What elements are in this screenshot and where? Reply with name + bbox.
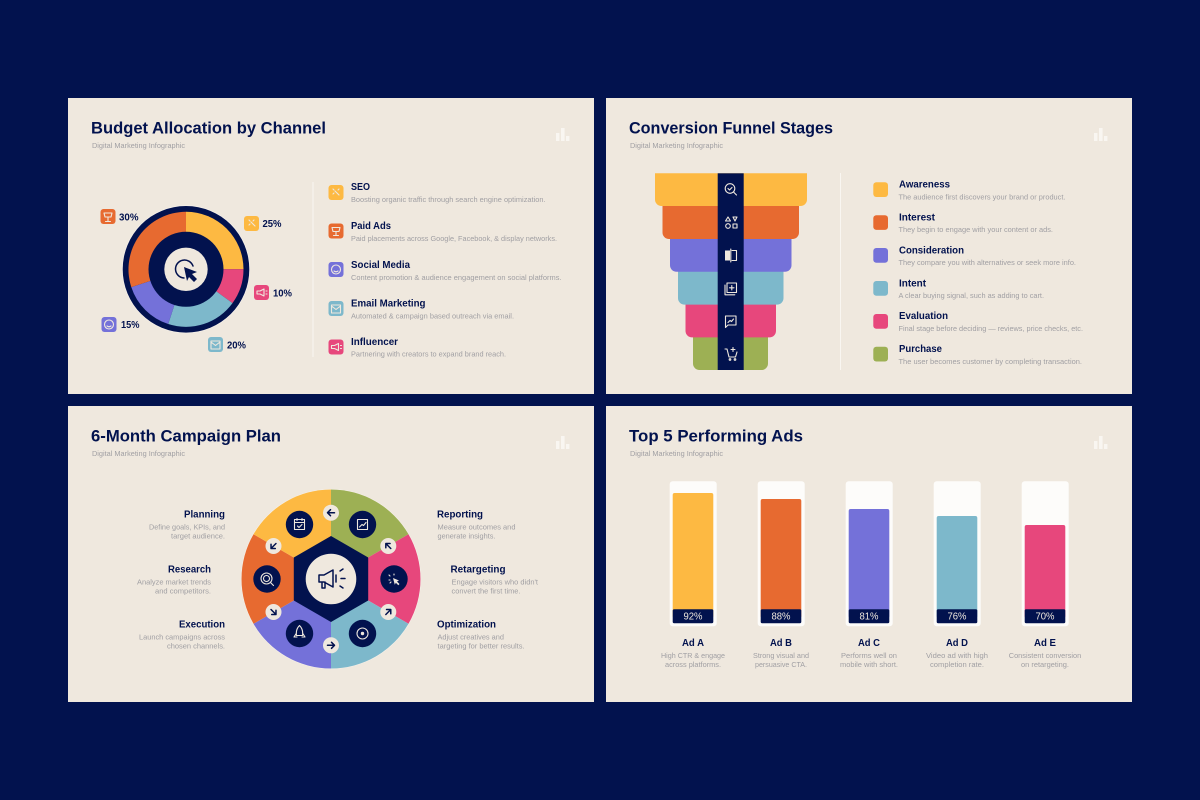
icon: cursor click	[176, 260, 197, 282]
step: Reporting: generate insights.	[438, 532, 496, 540]
bar: Ad D 76%: Video ad with high	[926, 651, 988, 660]
hexagon wheel	[241, 489, 421, 669]
step: Retargeting: Retargeting	[450, 564, 506, 576]
bar: Ad C 81%: Performs well on	[841, 651, 897, 660]
bar: Ad C 81%: 81%	[860, 612, 879, 622]
legend item: Social Media	[328, 260, 562, 282]
label: 20%	[208, 337, 247, 352]
divider	[840, 173, 841, 370]
bar: Ad D 76%: 76%	[948, 612, 967, 622]
step: Execution: Execution	[179, 620, 225, 630]
icon: circle dot	[349, 620, 376, 647]
icon: magnifier check	[725, 184, 736, 195]
bar: Ad B 88%	[753, 481, 809, 669]
bar: Ad A 92%	[661, 481, 725, 669]
bar: Ad D 76%: completion rate.	[930, 660, 984, 669]
icon: cursor spark	[380, 565, 408, 593]
legend item: Purchase	[873, 344, 1082, 366]
step: Planning: Define goals, KPIs, and	[149, 522, 225, 532]
legend item: Influencer: Influencer	[351, 337, 398, 348]
step: Retargeting	[450, 564, 539, 596]
icon: compare	[725, 249, 736, 262]
panel: conversion funnel stages	[606, 98, 1132, 394]
legend item: Paid Ads: Paid Ads	[351, 221, 391, 232]
bar: Ad E 70%: Ad E	[1034, 638, 1056, 649]
step: Optimization: Optimization	[437, 620, 496, 630]
divider	[312, 182, 314, 357]
legend item: Purchase: Purchase	[899, 344, 942, 355]
arrow: optimization to retargeting	[380, 604, 396, 620]
icon: growth chart	[349, 511, 376, 538]
legend item: Interest: Interest	[899, 212, 936, 224]
panel: 6-month campaign plan	[68, 406, 594, 702]
step: Execution	[139, 620, 225, 650]
legend item: Interest: They begin to engage with your content or ads.	[898, 225, 1053, 234]
legend item: SEO	[328, 182, 546, 204]
icon: bar chart mark	[1094, 436, 1107, 449]
bar: Ad A 92%: across platforms.	[665, 660, 721, 669]
arrow: execution to optimization	[323, 637, 339, 653]
step: Retargeting: Engage visitors who didn't	[452, 578, 539, 586]
step: Reporting	[437, 510, 516, 540]
legend item: Intent: A clear buying signal, such as adding to cart.	[898, 291, 1044, 300]
icon: megaphone	[319, 569, 345, 588]
subtitle: Digital Marketing Infographic	[92, 449, 185, 458]
legend item: Email Marketing: Email Marketing	[351, 298, 426, 310]
label: 10%	[254, 285, 293, 300]
legend item: Awareness: The audience first discovers your brand or product.	[898, 192, 1066, 201]
label: 25%: 25%	[262, 218, 282, 230]
arrow: research to execution	[266, 604, 282, 620]
panel: top 5 performing ads	[606, 406, 1132, 702]
title: Budget Allocation by Channel	[91, 120, 326, 138]
bar: Ad E 70%: 70%	[1036, 612, 1055, 622]
step: Planning: target audience.	[171, 532, 225, 540]
bar: Ad B 88%: Strong visual and	[753, 651, 809, 660]
label: 30%	[100, 209, 139, 224]
step: Reporting: Measure outcomes and	[438, 522, 516, 532]
legend item: Email Marketing	[328, 298, 514, 320]
bar: Ad C 81%: mobile with short.	[840, 660, 898, 669]
legend item: SEO: Boosting organic traffic through search engine optimization.	[351, 195, 546, 204]
icon: shapes	[726, 217, 737, 228]
legend item: Paid Ads	[328, 221, 557, 243]
bar: Ad E 70%	[1009, 481, 1081, 669]
icon: bar chart mark	[556, 436, 569, 449]
subtitle: Digital Marketing Infographic	[630, 141, 723, 150]
title: Top 5 Performing Ads	[629, 428, 803, 446]
icon: rocket	[286, 620, 313, 647]
legend item: Awareness	[873, 180, 1066, 201]
legend item: Influencer	[328, 337, 506, 358]
bar: Ad B 88%: persuasive CTA.	[755, 660, 807, 669]
arrow: retargeting to reporting	[380, 538, 396, 554]
icon: target	[253, 565, 281, 593]
label: 30%: 30%	[119, 212, 139, 224]
legend item: Consideration: They compare you with alternatives or seek more info.	[898, 258, 1076, 267]
label: 20%: 20%	[227, 340, 247, 352]
step: Execution: Launch campaigns across	[139, 632, 225, 642]
step: Retargeting: convert the first time.	[452, 586, 520, 596]
legend item: Awareness: Awareness	[899, 180, 950, 190]
step: Research: Research	[168, 564, 211, 576]
legend item: Evaluation: Evaluation	[899, 311, 948, 322]
title: 6-Month Campaign Plan	[91, 428, 281, 446]
legend item: Consideration: Consideration	[899, 245, 964, 256]
label: 25%	[244, 216, 282, 231]
step: Research: Analyze market trends	[137, 578, 211, 586]
panel: budget allocation by channel	[68, 98, 594, 394]
title: Conversion Funnel Stages	[629, 120, 833, 138]
legend item: Interest	[873, 212, 1053, 234]
arrow: planning to research	[266, 538, 282, 554]
bar: Ad E 70%: Consistent conversion	[1009, 651, 1081, 660]
subtitle: Digital Marketing Infographic	[92, 141, 185, 150]
funnel chart	[655, 173, 807, 370]
legend item: Influencer: Partnering with creators to expand brand reach.	[351, 350, 506, 358]
step: Reporting: Reporting	[437, 510, 483, 520]
bar: Ad C 81%	[840, 481, 898, 669]
bar: Ad B 88%: Ad B	[770, 638, 792, 649]
legend item: Email Marketing: Automated & campaign based outreach via email.	[351, 312, 514, 320]
step: Research: and competitors.	[155, 586, 211, 596]
subtitle: Digital Marketing Infographic	[630, 449, 723, 458]
legend item: Evaluation	[873, 311, 1083, 333]
bar: Ad B 88%: 88%	[772, 612, 791, 622]
step: Execution: chosen channels.	[167, 642, 225, 650]
donut chart	[122, 205, 250, 333]
legend item: Intent	[873, 278, 1044, 300]
legend item: Paid Ads: Paid placements across Google, Facebook, & display networks.	[351, 234, 557, 243]
label: 10%: 10%	[273, 288, 293, 300]
legend item: Intent: Intent	[899, 278, 927, 289]
arrow: reporting to planning	[323, 505, 339, 521]
step: Optimization: Adjust creatives and	[438, 632, 504, 642]
icon: bar chart mark	[1094, 128, 1107, 141]
legend item: Evaluation: Final stage before deciding — reviews, price checks, etc.	[898, 324, 1083, 333]
step: Planning	[149, 510, 225, 540]
bar: Ad C 81%: Ad C	[858, 638, 880, 649]
legend item: Social Media: Content promotion & audience engagement on social platforms.	[351, 273, 562, 282]
legend item: Social Media: Social Media	[351, 260, 410, 271]
step: Planning: Planning	[184, 510, 225, 520]
label: 15%: 15%	[121, 319, 140, 331]
legend item: SEO: SEO	[351, 182, 370, 193]
legend item: Consideration	[873, 245, 1076, 267]
bar: Ad D 76%	[926, 481, 988, 669]
icon: add to list	[725, 283, 736, 295]
bar: Ad A 92%: Ad A	[682, 638, 704, 649]
label: 15%	[102, 317, 140, 332]
step: Optimization	[437, 620, 524, 650]
bar: Ad E 70%: on retargeting.	[1021, 660, 1069, 669]
bar: Ad D 76%: Ad D	[946, 638, 968, 649]
bar: Ad A 92%: High CTR & engage	[661, 651, 725, 660]
step: Optimization: targeting for better results.	[438, 642, 524, 650]
bar: Ad A 92%: 92%	[684, 612, 703, 622]
step: Research	[137, 564, 211, 596]
icon: bar chart mark	[556, 128, 569, 141]
icon: calendar check	[286, 511, 313, 538]
legend item: Purchase: The user becomes customer by completing transaction.	[898, 357, 1082, 366]
icon: shopping cart	[725, 348, 737, 360]
icon: message chart	[726, 316, 736, 328]
